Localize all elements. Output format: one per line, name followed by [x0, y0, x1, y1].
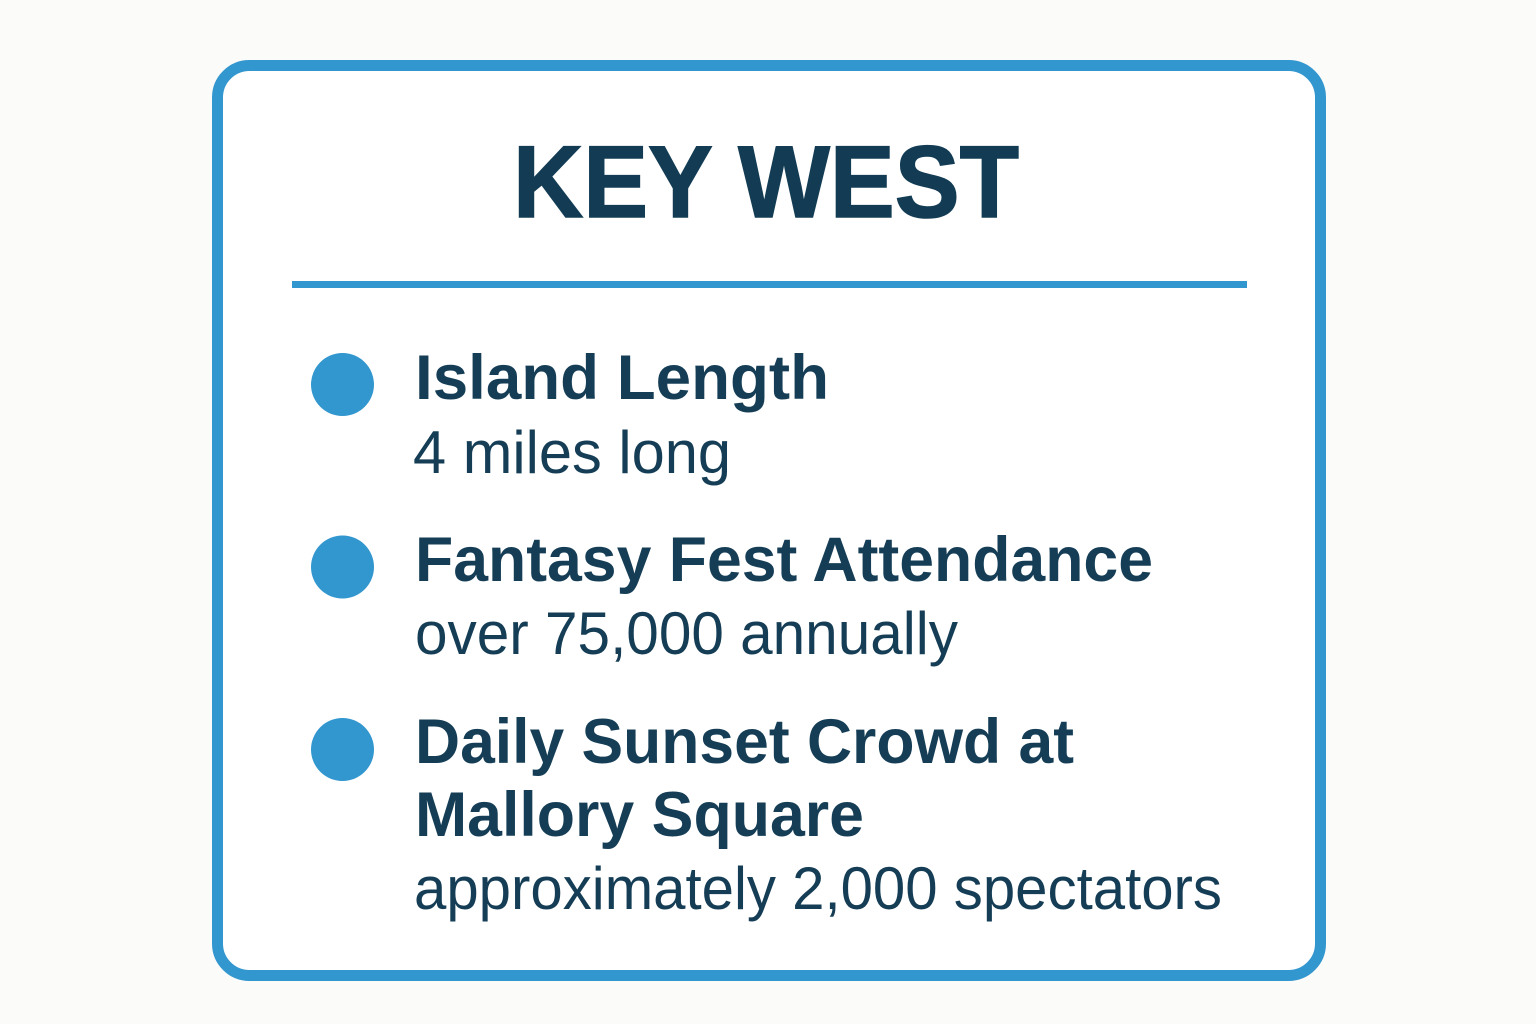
heading: fantasy fest attendance: Fantasy Fest Attendance [415, 525, 1153, 595]
icon: bullet dot [311, 353, 374, 416]
text: approximately 2,000 spectators: approximately 2,000 spectators [414, 855, 1222, 922]
heading: island length: Island Length [415, 343, 829, 413]
text: over 75,000 annually: over 75,000 annually [415, 600, 958, 667]
icon: bullet dot [311, 718, 374, 781]
icon: bullet dot [311, 536, 374, 598]
panel: key west card [218, 66, 1320, 976]
heading: daily sunset crowd at mallory square: Mallory Square [415, 780, 864, 850]
item: daily sunset crowd [311, 707, 1222, 922]
text: 4 miles long: 4 miles long [413, 419, 731, 486]
title: KEY WEST [513, 125, 1019, 239]
item: island length [311, 343, 829, 486]
heading: daily sunset crowd at mallory square: Daily Sunset Crowd at [415, 707, 1074, 777]
item: fantasy fest attendance [311, 525, 1153, 667]
heading: daily sunset crowd at mallory square [415, 707, 1074, 850]
